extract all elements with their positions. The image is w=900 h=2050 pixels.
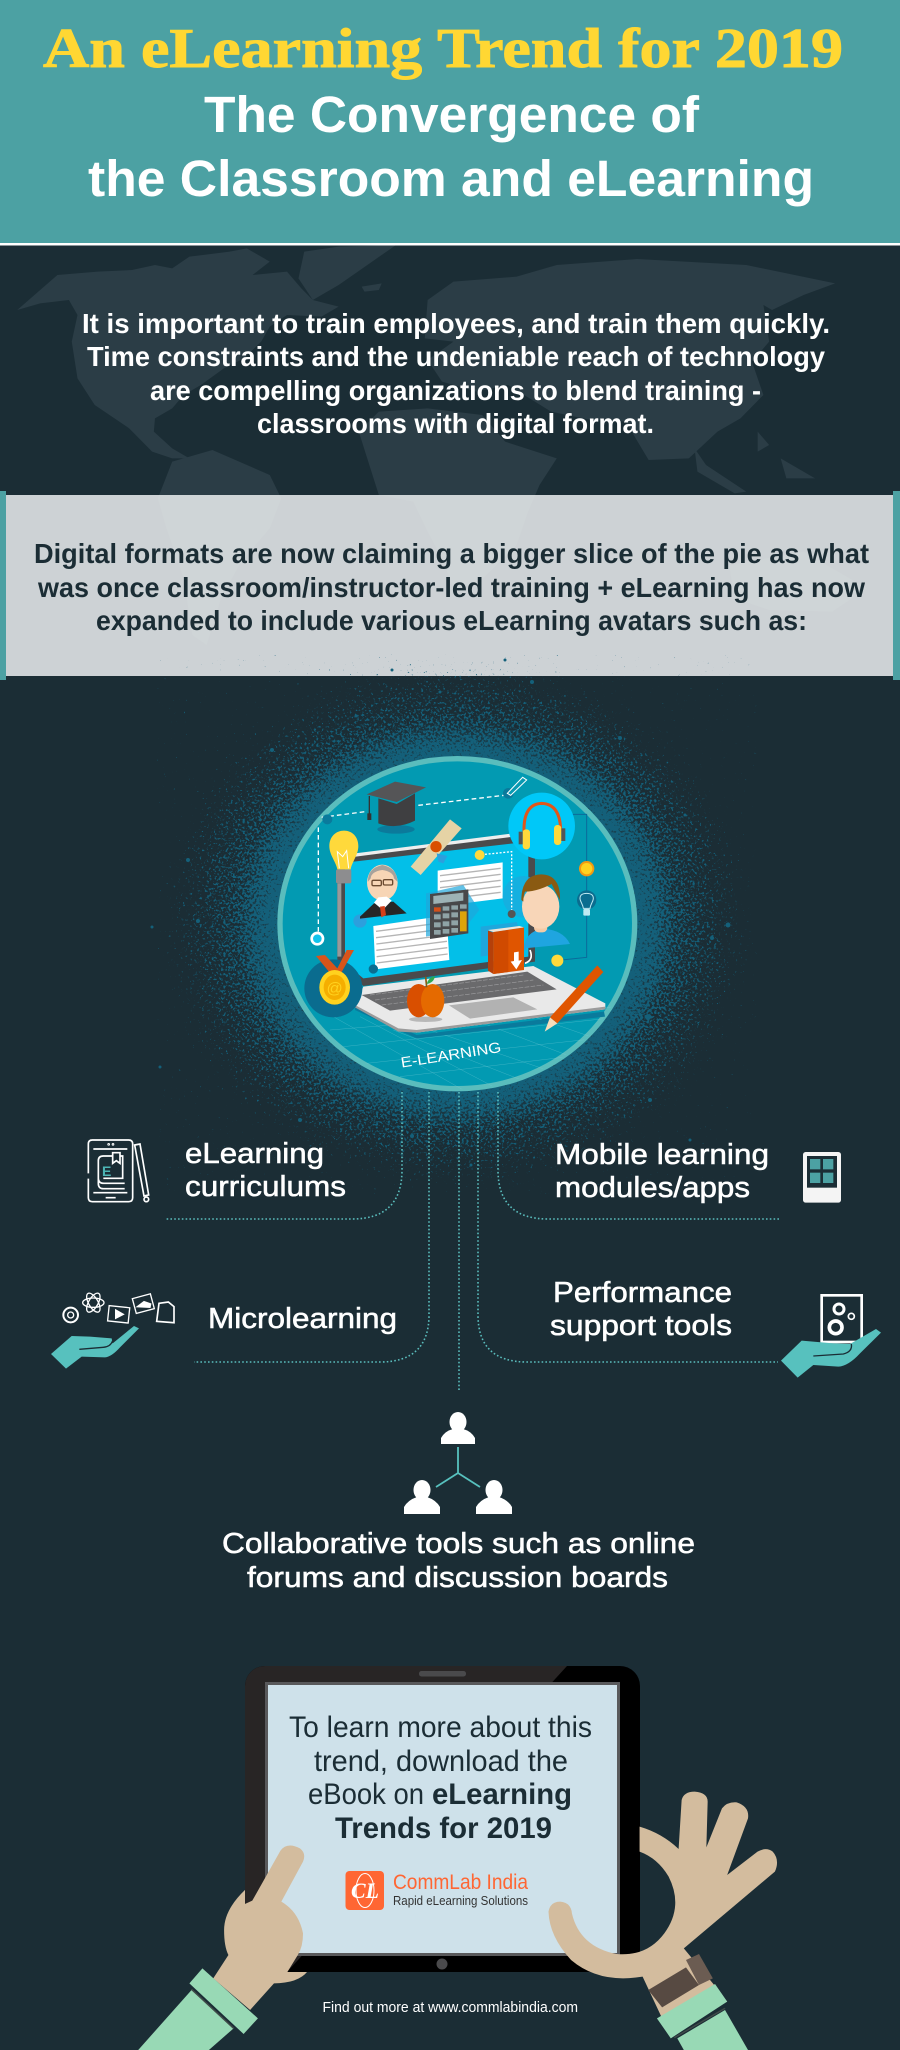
subtitle: the Classroom and eLearning: [88, 150, 814, 207]
icon: pencil: [545, 965, 603, 1032]
dotted connectors: [166, 1092, 781, 1390]
icon: headphones: [508, 793, 575, 859]
student: [481, 874, 570, 957]
yellow nodes: [475, 850, 594, 967]
intro paragraph: It is important to train employees, and train them quickly.: [82, 308, 830, 339]
illustration: e-learning circle: [280, 759, 635, 1090]
intro paragraph: classrooms with digital format.: [257, 408, 654, 439]
icon: microlearning hand: [51, 1291, 174, 1369]
label: collaborative tools: [222, 1528, 695, 1594]
desk grid: [330, 1007, 623, 1090]
world map backdrop: [17, 245, 867, 645]
icon: book: [488, 926, 524, 974]
e-learning label: E-LEARNING: [400, 1040, 502, 1072]
subtitle: [88, 86, 814, 207]
logo: CommLab India: [346, 1871, 528, 1910]
icon: light bulb: [329, 831, 358, 883]
label: eLearning curriculums: eLearning: [185, 1138, 324, 1170]
icon: performance hand: [781, 1295, 881, 1378]
calculator: [426, 885, 479, 939]
laptop base: [355, 966, 605, 1038]
intro paragraph: are compelling organizations to blend training -: [150, 375, 761, 406]
professor: [360, 865, 407, 919]
intro paragraph: Time constraints and the undeniable reach of technology: [87, 341, 825, 372]
document: upper: [438, 862, 503, 907]
header band: [0, 0, 900, 243]
header divider: [0, 243, 900, 246]
footer link text: Find out more at www.commlabindia.com: [322, 1999, 578, 2016]
label: mobile learning: [555, 1139, 769, 1204]
icon: graduation cap: [367, 782, 426, 834]
panel: digital formats: expanded to include various eLearning avatars such as:: [96, 605, 807, 636]
splatter glow behind circle: [150, 654, 757, 1194]
right hand: [548, 1792, 777, 2050]
tablet text: trend, download the: [314, 1745, 568, 1778]
label: performance support tools: [550, 1277, 732, 1342]
icon: ebook phone: E: [102, 1163, 111, 1179]
icon: diploma scroll: [411, 819, 462, 875]
document: lower: [373, 915, 449, 969]
icon: ebook phone: [88, 1140, 149, 1202]
icon: collaboration network: [404, 1412, 512, 1514]
label: mobile learning: Mobile learning: [555, 1139, 769, 1171]
icon: small bulb: [577, 890, 596, 916]
panel: digital formats: was once classroom/instructor-led training + eLearning has now: [37, 572, 865, 603]
circle disc: [280, 759, 635, 1089]
dashed connectors: [318, 795, 507, 932]
tablet text: eBook on: [308, 1778, 424, 1811]
icon: medal: @: [327, 980, 343, 997]
title: An eLearning Trend for 2019: An eLearning Trend for 2019: [43, 18, 843, 80]
subtitle: The Convergence of: [204, 86, 700, 143]
logo: CommLab India: CommLab India: [393, 1871, 528, 1894]
tablet text: Trends for 2019: [335, 1812, 552, 1845]
intro paragraph: [82, 308, 830, 439]
node connectors: [360, 814, 587, 970]
laptop screen: [337, 833, 535, 986]
label: performance support tools: support tools: [550, 1310, 732, 1342]
logo: CommLab India: Rapid eLearning Solutions: [393, 1893, 528, 1908]
icon: mobile tablet: [803, 1152, 841, 1203]
label: collaborative tools: Collaborative tools such as online: [222, 1528, 695, 1560]
left hand behind tablet: [138, 1890, 307, 2050]
logo: CommLab India: CL: [351, 1878, 379, 1903]
icon: pencil outline: [507, 777, 527, 795]
label: microlearning: Microlearning: [208, 1303, 397, 1335]
panel: digital formats: [0, 491, 900, 680]
panel: digital formats: Digital formats are now claiming a bigger slice of the pie as what: [34, 538, 869, 569]
label: performance support tools: Performance: [553, 1277, 732, 1309]
left hand finger: [228, 1845, 304, 1982]
icon: apple: [407, 976, 444, 1022]
tablet text: eLearning: [432, 1778, 572, 1811]
icon: ring node: [312, 933, 323, 944]
tablet text: To learn more about this: [289, 1711, 592, 1744]
tablet: [245, 1666, 640, 1972]
label: eLearning curriculums: [185, 1138, 346, 1203]
label: eLearning curriculums: curriculums: [185, 1171, 346, 1203]
label: collaborative tools: forums and discussion boards: [247, 1562, 668, 1594]
icon: medal: [304, 950, 362, 1017]
watch: [648, 1954, 713, 2007]
label: mobile learning: modules/apps: [555, 1172, 750, 1204]
tablet text: [289, 1711, 592, 1845]
